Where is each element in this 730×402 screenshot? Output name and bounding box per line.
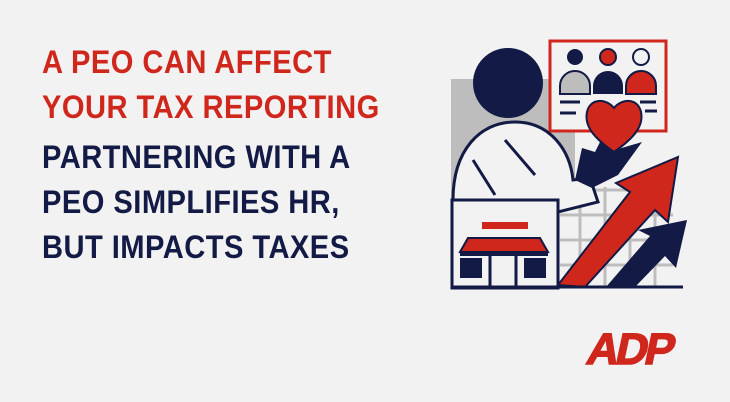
- heart: [586, 101, 642, 152]
- baseline: [453, 286, 683, 288]
- subtitle: [42, 139, 351, 265]
- profile panel: [550, 41, 666, 131]
- title: A PEO CAN AFFECT: [42, 44, 332, 80]
- grid: [560, 187, 673, 287]
- red arrow: [558, 157, 678, 287]
- head: [473, 48, 543, 118]
- title: [42, 44, 380, 125]
- title: YOUR TAX REPORTING: [42, 89, 380, 125]
- person body: [453, 122, 598, 212]
- subtitle: PEO SIMPLIFIES HR,: [42, 184, 340, 220]
- hand: [575, 142, 642, 188]
- store: [482, 222, 528, 229]
- desk: [452, 200, 558, 288]
- subtitle: BUT IMPACTS TAXES: [42, 229, 350, 265]
- navy arrow: [606, 220, 687, 287]
- logo: ADP: ADP: [583, 325, 677, 374]
- gray backdrop: [451, 79, 575, 203]
- subtitle: PARTNERING WITH A: [42, 139, 351, 175]
